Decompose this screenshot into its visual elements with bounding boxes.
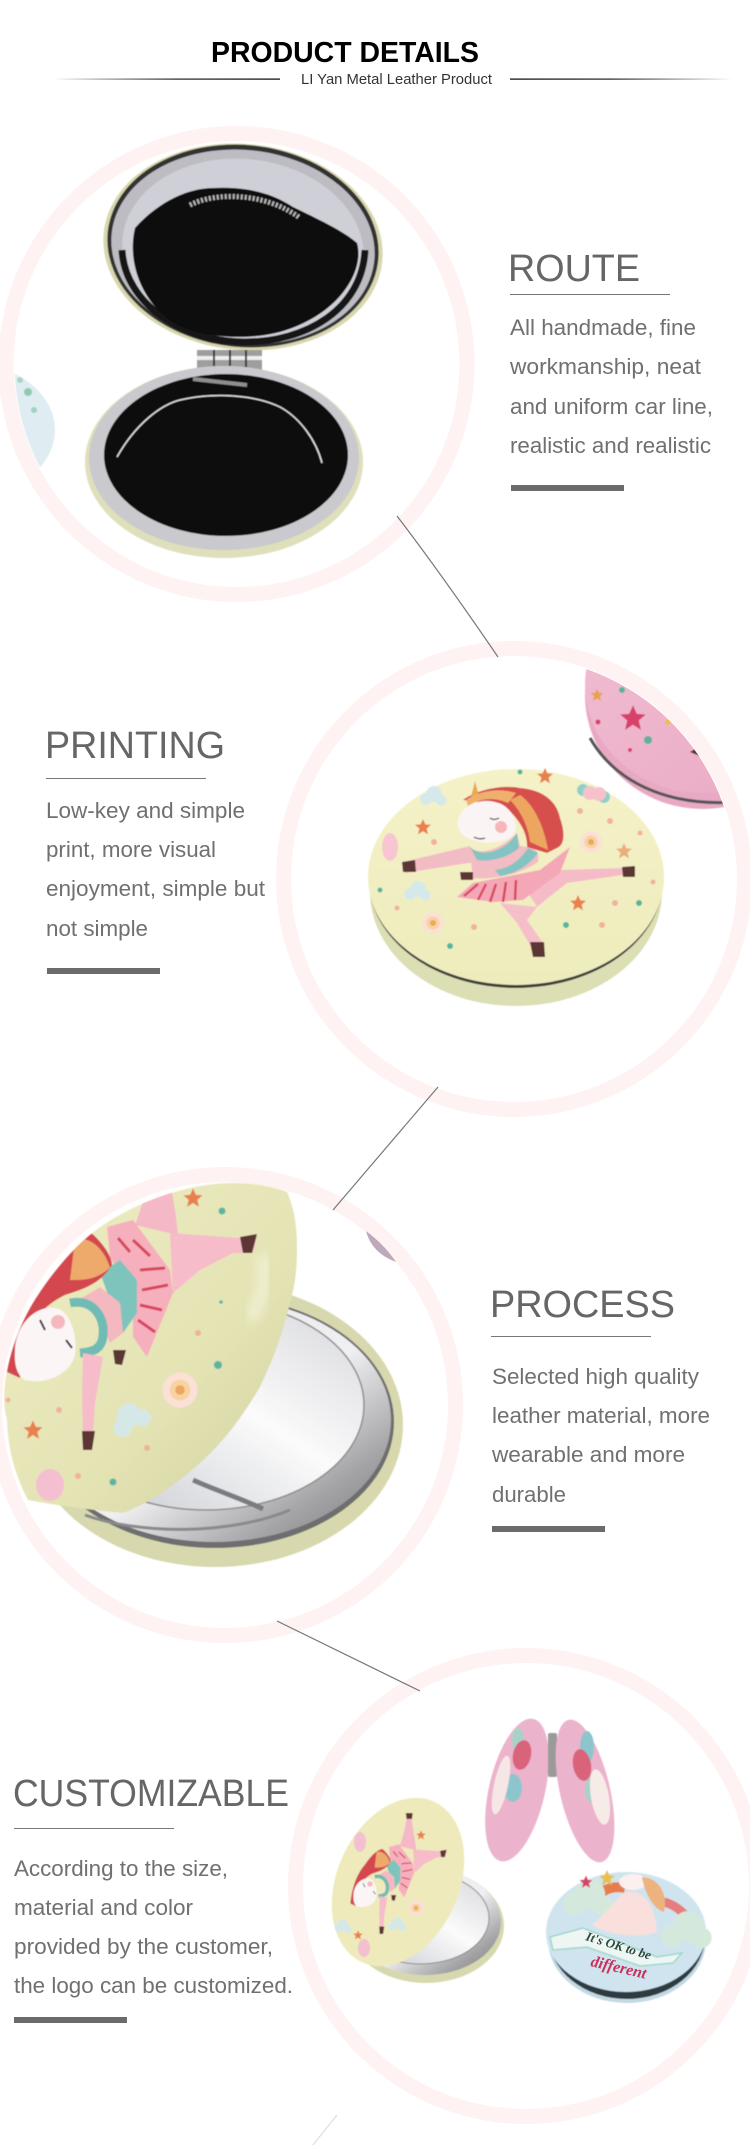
lid decorations — [6, 1188, 264, 1501]
body text: and uniform car line, — [510, 394, 713, 419]
print decorations — [378, 768, 656, 949]
title: PRODUCT DETAILS — [211, 37, 479, 69]
connector line 4 — [313, 2115, 337, 2145]
body text: not simple — [46, 916, 148, 941]
top lid — [93, 130, 393, 364]
panel: printing text — [45, 725, 266, 974]
body text: material and color — [14, 1895, 194, 1920]
blue compact fragment — [14, 374, 56, 467]
ring 2 — [284, 648, 744, 1110]
purple compact fragment — [366, 1231, 396, 1262]
ring 1 — [6, 134, 467, 594]
body text: wearable and more — [491, 1442, 685, 1467]
body text: enjoyment, simple but — [46, 876, 266, 901]
hinge — [548, 1733, 557, 1777]
left half — [473, 1713, 561, 1867]
connector line 2 — [333, 1087, 438, 1210]
pink compact fragment — [584, 669, 724, 810]
body text: workmanship, neat — [509, 354, 702, 379]
heading: ROUTE — [508, 248, 640, 290]
panel: process photo — [0, 1140, 456, 1636]
icon: pink compact pair — [473, 1713, 626, 1868]
icon: cream compact with unicorn — [368, 768, 664, 1006]
heading: CUSTOMIZABLE — [13, 1773, 289, 1815]
bottom base — [85, 366, 363, 558]
body text: print, more visual — [46, 837, 216, 862]
compact lettering — [583, 1928, 653, 1983]
compact lettering: different — [589, 1953, 649, 1983]
icon: open cream compact — [331, 1797, 504, 1984]
compact lettering: It's OK to be — [583, 1928, 653, 1963]
right half — [544, 1714, 626, 1868]
mirror base — [27, 1283, 403, 1567]
body text: durable — [492, 1482, 566, 1507]
panel: route photo — [0, 130, 467, 594]
panel: route text — [508, 248, 713, 491]
icon: open mirror compact — [0, 130, 393, 558]
lid — [4, 1182, 298, 1514]
body text — [14, 1856, 293, 1998]
body text: leather material, more — [492, 1403, 710, 1428]
icon: blue compact — [546, 1870, 712, 2003]
subtitle: LI Yan Metal Leather Product — [301, 72, 492, 88]
connector line 3 — [277, 1621, 420, 1691]
body text: provided by the customer, — [14, 1934, 273, 1959]
panel: customizable text — [13, 1773, 293, 2023]
body text: Low-key and simple — [46, 798, 245, 823]
ring 3 — [0, 1174, 456, 1636]
body text — [46, 798, 266, 941]
icon: half-open compact — [4, 1140, 403, 1567]
heading: PROCESS — [490, 1284, 675, 1326]
panel: customizable photo — [296, 1656, 750, 2116]
body text: Selected high quality — [492, 1364, 700, 1389]
panel: printing photo — [284, 577, 750, 1110]
header — [53, 37, 732, 88]
connector line 1 — [397, 516, 498, 657]
body text — [491, 1364, 710, 1507]
body text: the logo can be customized. — [14, 1973, 293, 1998]
body text: All handmade, fine — [510, 315, 696, 340]
unicorn illustration — [402, 781, 635, 957]
panel: process text — [490, 1284, 710, 1532]
hinge — [197, 350, 262, 370]
heading: PRINTING — [45, 725, 225, 767]
body text: realistic and realistic — [510, 433, 711, 458]
ring 4 — [296, 1656, 750, 2116]
body text — [509, 315, 713, 458]
body text: According to the size, — [14, 1856, 228, 1881]
